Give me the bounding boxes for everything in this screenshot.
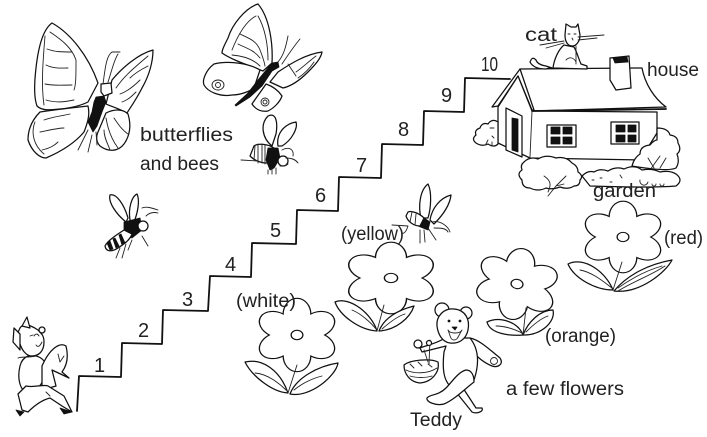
label: cat: cat — [525, 25, 558, 46]
arms and body — [470, 338, 501, 367]
house — [492, 56, 666, 160]
staircase — [77, 78, 510, 411]
flower: white — [245, 299, 339, 394]
garden bushes — [474, 120, 680, 196]
Teddy bear with basket — [404, 303, 501, 413]
house walls — [498, 76, 657, 160]
flower: orange — [468, 242, 566, 335]
label: a few flowers: a few flowers — [506, 379, 624, 400]
butterfly large, left — [28, 23, 153, 158]
text: butterflies and bees: butterflies — [140, 125, 233, 146]
flower: red — [568, 202, 672, 291]
label: garden: garden — [593, 181, 656, 202]
step numbers: 6 — [315, 185, 326, 207]
flower: yellow — [335, 243, 438, 331]
text: butterflies and bees: and bees — [140, 154, 219, 175]
bee, left — [105, 194, 158, 258]
step numbers: 9 — [441, 85, 452, 107]
house roof — [520, 68, 666, 111]
label: white: (white) — [236, 291, 296, 312]
step numbers: 1 — [94, 355, 105, 377]
step numbers: 10 — [481, 54, 498, 76]
label: orange: (orange) — [545, 326, 616, 347]
window left — [547, 125, 576, 147]
step numbers: 3 — [182, 289, 193, 311]
label: Teddy: Teddy — [410, 410, 463, 431]
pig character — [13, 317, 72, 416]
label: house: house — [647, 60, 699, 81]
door — [506, 108, 522, 157]
label: red: (red) — [664, 228, 703, 249]
step numbers: 8 — [398, 119, 409, 141]
bee, by yellow flower — [392, 184, 451, 243]
step numbers — [94, 54, 498, 377]
butterfly upper, centre — [203, 4, 322, 111]
label: yellow: (yellow) — [341, 224, 404, 245]
basket with flowers — [404, 340, 438, 383]
window right — [611, 122, 639, 144]
text: butterflies and bees — [140, 125, 233, 175]
step numbers: 7 — [356, 155, 367, 177]
step numbers: 4 — [225, 254, 236, 276]
head and ears — [435, 303, 449, 317]
bee, upper — [241, 115, 298, 174]
chimney — [610, 56, 631, 90]
step numbers: 2 — [138, 320, 149, 342]
step numbers: 5 — [270, 220, 281, 242]
cat on roof — [530, 24, 604, 69]
